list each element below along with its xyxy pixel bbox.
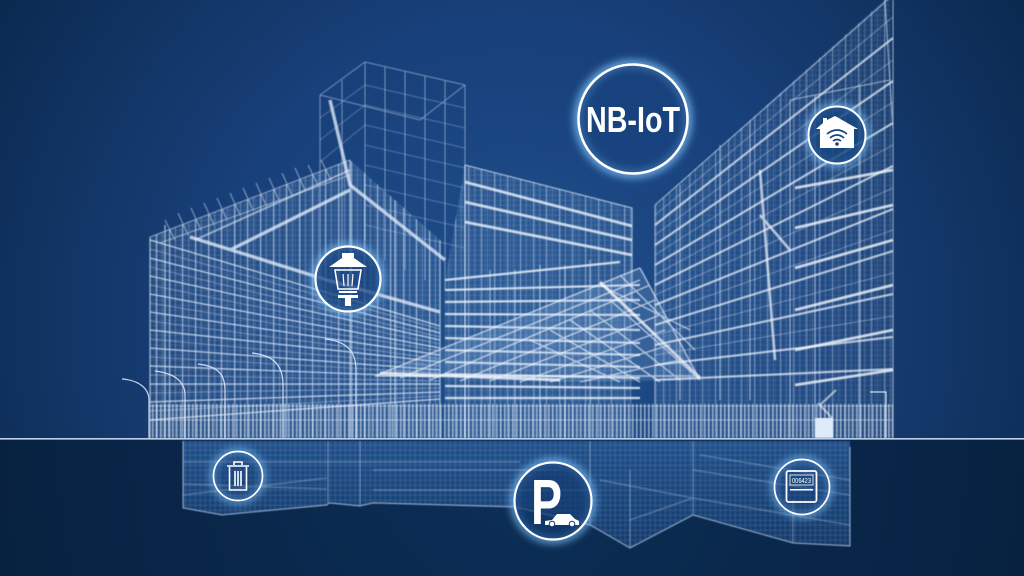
background ground bbox=[0, 440, 1024, 576]
wireframe city buildings bbox=[150, 0, 893, 438]
wireframe center building bbox=[445, 165, 640, 438]
wireframe reflection below the ground bbox=[183, 441, 850, 548]
icon: smart home wifi bbox=[808, 106, 866, 164]
icon: NB-IoT badge bbox=[578, 64, 688, 174]
icon: parking: P bbox=[531, 466, 562, 538]
ground-level facade band bbox=[150, 390, 893, 438]
wireframe right building bbox=[655, 0, 893, 438]
icon: utility meter bbox=[774, 459, 830, 515]
wireframe tower bbox=[320, 62, 465, 438]
icon: parking bbox=[514, 462, 592, 540]
wireframe left building bbox=[150, 100, 445, 438]
icon: street lamp bbox=[315, 246, 381, 312]
icon: waste bin bbox=[213, 451, 263, 501]
street lights bbox=[122, 339, 886, 438]
background sky bbox=[0, 0, 1024, 440]
icon: utility meter: 006423 bbox=[792, 478, 811, 485]
label: NB-IoT: NB-IoT bbox=[586, 99, 680, 140]
ground horizon line bbox=[0, 438, 1024, 440]
wireframe central canopy bbox=[375, 268, 700, 382]
